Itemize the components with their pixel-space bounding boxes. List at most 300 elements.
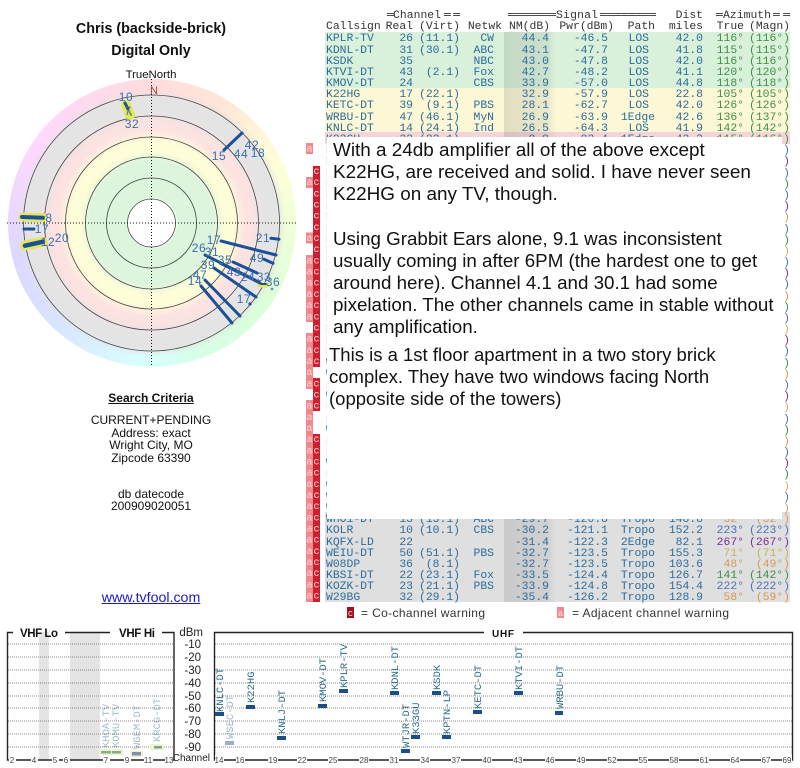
table rows bottom: -31.4 xyxy=(515,537,549,549)
co-channel warning column: c xyxy=(313,580,320,591)
adjacent channel warning column: a xyxy=(306,569,313,580)
table rows top: K22CH xyxy=(326,134,360,146)
dBm scale: -20 xyxy=(184,652,201,664)
table rows bottom: ABC xyxy=(473,514,494,526)
table rows top: 28.1 xyxy=(522,100,549,112)
table rows bottom: 148.8 xyxy=(669,514,703,526)
table rows top: WRBU-DT xyxy=(326,112,374,124)
table rows bottom: KBSI-DT xyxy=(326,570,374,582)
hidden rows: edge slivers: ) xyxy=(783,503,790,515)
table rows bottom: Tropo xyxy=(621,525,655,537)
hidden rows: edge slivers: ) xyxy=(783,279,790,291)
channel ticks: 28 xyxy=(360,756,369,765)
table rows bottom: 48° xyxy=(723,559,744,571)
table rows top: LOS xyxy=(628,78,649,90)
channel ticks: 37 xyxy=(452,756,461,765)
station channel labels: 15 xyxy=(212,149,226,163)
adjacent channel warning column: a xyxy=(306,458,313,468)
channel ticks: 13 xyxy=(165,756,174,765)
table header: Pwr(dBm) xyxy=(559,21,614,33)
legend: warnings xyxy=(347,606,729,620)
hidden rows: edge slivers: K xyxy=(326,179,333,191)
table rows top: (142°) xyxy=(749,123,790,135)
table rows top: 136° xyxy=(717,112,744,124)
adjacent channel warning column: a xyxy=(306,379,313,390)
table rows top: 24 xyxy=(399,78,413,90)
hidden rows: edge slivers: ) xyxy=(783,346,790,358)
dBm scale: -80 xyxy=(184,729,201,741)
table rows top: 105° xyxy=(717,89,744,101)
station channel labels: 12 xyxy=(41,235,55,249)
table rows bottom: CBS xyxy=(473,525,494,537)
hidden rows: edge slivers: K xyxy=(326,402,333,414)
table rows top: 32.9 xyxy=(522,89,549,101)
table rows bottom: Tropo xyxy=(621,581,655,593)
station channel labels: 20 xyxy=(55,231,69,245)
table rows top: 42.0 xyxy=(676,56,703,68)
table header: Dist xyxy=(676,10,703,22)
adjacent channel warning column: a xyxy=(306,268,313,279)
link: tvfool: www.tvfool.com xyxy=(102,590,200,606)
channel ticks: 2 xyxy=(10,756,15,765)
table rows bottom: WEIU-DT xyxy=(326,548,374,560)
hidden rows: edge slivers: K xyxy=(326,257,333,269)
adjacent channel warning column: a xyxy=(306,357,313,368)
table rows top: 126° xyxy=(717,100,744,112)
uhf station labels: KPTN-LP xyxy=(442,690,454,734)
table rows bottom: 154.4 xyxy=(669,581,703,593)
co-channel warning column: c xyxy=(313,357,320,368)
table header: NM(dB) xyxy=(509,21,550,33)
adjacent channel warning column: a xyxy=(306,290,313,301)
co-channel warning column: c xyxy=(313,480,320,491)
table rows top: 47 xyxy=(399,112,413,124)
table rows top: LOS xyxy=(628,33,649,45)
note: grabbit ears: any amplification. xyxy=(333,316,478,337)
note: grabbit ears: pixelation. The other channels came in stable without xyxy=(333,294,774,315)
station channel labels: 49 xyxy=(250,251,264,265)
adjacent channel warning column: a xyxy=(306,502,313,513)
table rows bottom: Tropo xyxy=(621,514,655,526)
uhf station labels: WSEC-DT xyxy=(225,695,237,739)
table rows top: KSDK xyxy=(326,56,354,68)
table rows top: 22 xyxy=(399,134,413,146)
channel ticks: 22 xyxy=(298,756,307,765)
station channel labels: 39 xyxy=(201,258,215,272)
spectrum chart xyxy=(6,627,794,765)
station channel labels xyxy=(35,90,280,306)
table rows top: 115° xyxy=(717,45,744,57)
hidden rows: edge slivers: ) xyxy=(783,481,790,493)
adjacent channel warning column: a xyxy=(306,435,313,446)
table rows top: 142° xyxy=(717,123,744,135)
channel ticks: 6 xyxy=(64,756,69,765)
dBm scale: -70 xyxy=(184,716,201,728)
note: apartment xyxy=(329,344,716,409)
adjacent channel warning column: a xyxy=(306,234,313,245)
table rows top: (116°) xyxy=(749,134,790,146)
co-channel warning column: c xyxy=(313,290,320,301)
table rows top: LOS xyxy=(628,56,649,68)
table rows bottom: 82.1 xyxy=(676,537,703,549)
uhf station labels: WRBU-DT xyxy=(555,665,567,709)
channel ticks: 49 xyxy=(577,756,586,765)
station channel labels: 44 xyxy=(234,147,248,161)
station bearing lines xyxy=(22,103,279,323)
channel ticks: 5 xyxy=(53,756,58,765)
hidden rows: edge slivers: K xyxy=(326,201,333,213)
table header: (Magn) xyxy=(749,21,790,33)
co-channel warning column: c xyxy=(313,491,320,502)
uhf station labels: KETC-DT xyxy=(473,665,485,709)
hidden rows: edge slivers xyxy=(326,145,790,515)
yellow halos for VHF stations xyxy=(23,105,267,285)
table header: (Virt) xyxy=(419,21,460,33)
channel ticks: 25 xyxy=(329,756,338,765)
table rows bottom: (10.1) xyxy=(419,525,460,537)
table rows top: (116°) xyxy=(749,33,790,45)
station channel labels: 17 xyxy=(237,292,251,306)
channel ticks: 43 xyxy=(514,756,523,765)
table rows bottom: (267°) xyxy=(749,537,790,549)
table header: Netwk xyxy=(468,21,502,33)
station channel labels: 42 xyxy=(245,138,259,152)
hidden rows: edge slivers: ) xyxy=(783,391,790,403)
hidden rows: edge slivers: K xyxy=(326,235,333,247)
co-channel warning column: c xyxy=(313,446,320,457)
hidden rows: edge slivers: ) xyxy=(783,268,790,280)
adjacent channel warning column: a xyxy=(306,346,313,357)
adjacent channel warning column: a xyxy=(306,256,313,267)
uhf station labels: KNLJ-DT xyxy=(277,690,289,734)
co-channel warning column: c xyxy=(313,223,320,234)
table header: ══ xyxy=(443,10,460,22)
station channel labels: 10 xyxy=(119,90,133,104)
note: grabbit ears: Using Grabbit Ears alone, 9.1 was inconsistent xyxy=(333,228,722,249)
table rows bottom: -33.5 xyxy=(515,570,549,582)
station channel labels: 36 xyxy=(266,275,280,289)
hidden rows: edge slivers: ) xyxy=(783,156,790,168)
table rows bottom xyxy=(326,514,790,604)
co-channel warning column: c xyxy=(313,390,320,401)
table header: ════════ xyxy=(599,10,656,22)
table rows top: LOS xyxy=(628,89,649,101)
table rows top: 22.8 xyxy=(676,89,703,101)
table rows bottom: -120.8 xyxy=(567,514,608,526)
hidden rows: edge slivers: K xyxy=(326,436,333,448)
hidden rows: edge slivers: K xyxy=(326,224,333,236)
table rows bottom: WHO1-DT xyxy=(326,514,374,526)
hidden rows: edge slivers: ) xyxy=(783,212,790,224)
station channel labels: 17 xyxy=(207,233,221,247)
channel ticks: 16 xyxy=(236,756,245,765)
channel ticks xyxy=(9,755,792,765)
table rows top: Fox xyxy=(473,67,494,79)
table header: Real xyxy=(386,21,413,33)
table header: Path xyxy=(628,21,655,33)
table rows top: 41.9 xyxy=(676,123,703,135)
co-channel warning column: c xyxy=(313,312,320,323)
table rows top: NBC xyxy=(473,56,494,68)
adjacent channel warning column: a xyxy=(306,513,313,524)
table rows top: -64.3 xyxy=(574,123,608,135)
adjacent channel warning column: a xyxy=(306,335,313,346)
table rows bottom: Tropo xyxy=(621,548,655,560)
hidden rows: edge slivers: K xyxy=(326,346,333,358)
co-channel warning column: c xyxy=(313,547,320,558)
co-channel warning column: c xyxy=(313,201,320,212)
dBm scale: -50 xyxy=(184,691,201,703)
table rows top: 31 xyxy=(399,45,413,57)
hidden rows: edge slivers: ) xyxy=(783,324,790,336)
uhf station labels: KDNL-DT xyxy=(390,646,402,690)
adjacent channel warning column: a xyxy=(306,558,313,569)
table rows top: (116°) xyxy=(749,56,790,68)
table rows top: -63.9 xyxy=(574,112,608,124)
co-channel warning column: c xyxy=(313,167,320,178)
vhf frame: VHF Lo xyxy=(20,628,58,640)
station channel labels: 26 xyxy=(192,241,206,255)
note: grabbit ears: around here). Channel 4.1 and 30.1 had some xyxy=(333,272,718,293)
note: grabbit ears: usually coming in after 6PM (the hardest one to get xyxy=(333,250,757,271)
table header: Channel xyxy=(393,10,441,22)
table rows top: 17 xyxy=(399,89,413,101)
table rows top: 14 xyxy=(399,123,413,135)
hidden rows: edge slivers: K xyxy=(326,246,333,258)
station channel labels: 35 xyxy=(218,253,232,267)
vhf station bars: KHOA-TV xyxy=(101,703,113,748)
uhf station labels: KPLR-TV xyxy=(339,643,351,688)
uhf station labels: WTJR-DT xyxy=(401,704,413,748)
vhf frame xyxy=(8,628,174,760)
table rows top: LOS xyxy=(628,123,649,135)
station channel labels: 47 xyxy=(193,268,207,282)
table rows top: (9.1) xyxy=(426,100,460,112)
label: True North: TrueNorth xyxy=(126,69,176,81)
table rows top: (24.1) xyxy=(419,123,460,135)
table rows top: CBS xyxy=(473,78,494,90)
table rows bottom: (223°) xyxy=(749,525,790,537)
note: grabbit ears xyxy=(333,228,774,337)
co-channel warning column: c xyxy=(313,469,320,480)
co-channel warning column: c xyxy=(313,256,320,267)
table rows bottom: -32.7 xyxy=(515,559,549,571)
table rows bottom: -121.1 xyxy=(567,525,608,537)
hidden rows: edge slivers: ) xyxy=(783,224,790,236)
table rows bottom: 2Edge xyxy=(621,537,655,549)
dBm scale: -60 xyxy=(184,703,201,715)
vhf station bars xyxy=(99,698,164,757)
table rows bottom: -30.2 xyxy=(515,525,549,537)
table rows bottom: -35.4 xyxy=(515,592,549,604)
channel ticks: 55 xyxy=(639,756,648,765)
table rows top: 43.1 xyxy=(522,45,549,57)
table rows top: PBS xyxy=(473,100,494,112)
table rows bottom: -33.9 xyxy=(515,581,549,593)
table rows top: LOS xyxy=(628,67,649,79)
table rows top: 26 xyxy=(399,33,413,45)
table rows top: (30.1) xyxy=(419,45,460,57)
search criteria block: CURRENT+PENDING xyxy=(91,413,211,427)
hidden rows: edge slivers: ) xyxy=(783,313,790,325)
station channel labels: 17 xyxy=(35,222,49,236)
table rows top: (137°) xyxy=(749,112,790,124)
adjacent channel warning column xyxy=(306,143,313,602)
hidden rows: edge slivers: K xyxy=(326,168,333,180)
hidden rows: edge slivers: ) xyxy=(783,302,790,314)
table rows top: 43 xyxy=(399,67,413,79)
legend: warnings: c xyxy=(348,609,353,619)
co-channel warning column: c xyxy=(313,178,320,189)
adjacent channel warning column: a xyxy=(306,413,313,424)
table rows top: 44.4 xyxy=(522,33,549,45)
table rows top: (2.1) xyxy=(426,67,460,79)
table rows bottom: KOLR xyxy=(326,525,354,537)
table rows bottom: 152.2 xyxy=(669,525,703,537)
uhf frame: UHF xyxy=(492,629,514,640)
hidden rows: edge slivers: K xyxy=(326,335,333,347)
co-channel warning column: c xyxy=(313,335,320,346)
hidden rows: edge slivers: W xyxy=(326,503,333,515)
channel ticks: 58 xyxy=(670,756,679,765)
table header: miles xyxy=(669,21,703,33)
hidden rows: edge slivers: K xyxy=(326,212,333,224)
hidden rows: edge slivers: ) xyxy=(783,179,790,191)
station channel labels: 21 xyxy=(256,231,270,245)
co-channel warning column: c xyxy=(313,189,320,200)
co-channel warning column: c xyxy=(313,458,320,468)
channel ticks: 69 xyxy=(783,756,792,765)
dBm scale: -40 xyxy=(184,678,201,690)
hidden rows: edge slivers: ) xyxy=(783,380,790,392)
hidden rows: edge slivers: K xyxy=(326,190,333,202)
uhf station labels: KNLC-DT xyxy=(215,668,227,712)
table rows top: (46.1) xyxy=(419,112,460,124)
adjacent channel warning column: a xyxy=(306,547,313,558)
table rows bottom: 23 xyxy=(399,581,413,593)
hidden rows: edge slivers: K xyxy=(326,447,333,459)
hidden rows: edge slivers: K xyxy=(326,414,333,426)
legend: warnings: = Adjacent channel warning xyxy=(572,606,729,620)
hidden rows: edge slivers: W xyxy=(326,481,333,493)
channel ticks: 11 xyxy=(144,756,153,765)
table rows bottom: -29.7 xyxy=(515,514,549,526)
channel ticks: 40 xyxy=(483,756,492,765)
table rows top: 42.6 xyxy=(676,112,703,124)
uhf station labels: K22HG xyxy=(246,671,258,703)
table rows bottom: 155.3 xyxy=(669,548,703,560)
table rows top: (115°) xyxy=(749,45,790,57)
dBm scale: Channel xyxy=(173,753,210,764)
station channel labels: 7 xyxy=(124,104,132,118)
table rows bottom: (142°) xyxy=(749,570,790,582)
adjacent channel warning column: a xyxy=(306,480,313,491)
table rows top: (126°) xyxy=(749,100,790,112)
search criteria block: Address: exact xyxy=(111,426,191,440)
table rows top: 41.8 xyxy=(676,45,703,57)
table rows bottom: 13 xyxy=(399,514,413,526)
station channel labels: 31 xyxy=(205,245,219,259)
vhf frame: VHF Hi xyxy=(119,628,155,640)
table rows top: 41.1 xyxy=(676,67,703,79)
channel ticks: 46 xyxy=(546,756,555,765)
table rows top: 1Edge xyxy=(621,134,655,146)
search criteria block: 200909020051 xyxy=(111,499,191,513)
hidden rows: edge slivers: ) xyxy=(783,469,790,481)
table rows bottom: (13.1) xyxy=(419,514,460,526)
channel ticks: 14 xyxy=(215,756,224,765)
note: apartment: complex. They have two windows facing North xyxy=(329,366,709,387)
hidden rows: edge slivers: W xyxy=(326,369,333,381)
hidden rows: edge slivers: W xyxy=(326,492,333,504)
table rows top: (118°) xyxy=(749,78,790,90)
table rows bottom: -124.4 xyxy=(567,570,608,582)
hidden rows: edge slivers: ) xyxy=(783,447,790,459)
table rows bottom: 128.9 xyxy=(669,592,703,604)
station channel labels: 18 xyxy=(251,146,265,160)
table header: ══ xyxy=(772,10,790,22)
hidden rows: edge slivers: ) xyxy=(783,369,790,381)
adjacent channel warning column: a xyxy=(306,301,313,312)
table rows bottom: (51.1) xyxy=(419,548,460,560)
vhf station bars: WGEM-DT xyxy=(132,705,144,749)
co-channel warning column: c xyxy=(313,268,320,279)
dBm scale: -90 xyxy=(184,742,201,754)
co-channel warning column: c xyxy=(313,379,320,390)
table rows bottom: PBS xyxy=(473,581,494,593)
table rows bottom: -122.3 xyxy=(567,537,608,549)
co-channel warning column: c xyxy=(313,435,320,446)
uhf station labels: KTVI-DT xyxy=(514,646,526,690)
note: amplifier xyxy=(333,140,751,205)
hidden rows: edge slivers: ) xyxy=(783,458,790,470)
adjacent channel warning column: a xyxy=(306,524,313,536)
table rows top: -57.0 xyxy=(574,78,608,90)
dBm scale: -10 xyxy=(184,639,201,651)
co-channel warning column: c xyxy=(313,301,320,312)
table rows top: (11.1) xyxy=(419,33,460,45)
hidden rows: edge slivers: ) xyxy=(783,402,790,414)
table rows top: KTVI-DT xyxy=(326,67,374,79)
co-channel warning column: c xyxy=(313,245,320,256)
table rows bottom: -123.5 xyxy=(567,559,608,571)
table rows top: 8.8 xyxy=(528,134,549,146)
table rows top xyxy=(326,33,790,146)
adjacent channel warning column: a xyxy=(306,446,313,457)
vhf station bars: KRCG-DT xyxy=(152,698,164,742)
adjacent channel warning column: a xyxy=(306,580,313,591)
table rows top: 39 xyxy=(399,100,413,112)
co-channel warning column: c xyxy=(313,234,320,245)
table rows bottom: Tropo xyxy=(621,559,655,571)
table rows top: -48.2 xyxy=(574,67,608,79)
table rows top: 116° xyxy=(717,56,744,68)
table rows top: KPLR-TV xyxy=(326,33,374,45)
legend: warnings: a xyxy=(558,609,564,619)
table header: ═ xyxy=(386,10,394,22)
adjacent channel warning column: a xyxy=(306,402,313,413)
co-channel warning column: c xyxy=(313,402,320,413)
hidden rows: edge slivers: K xyxy=(326,156,333,168)
channel ticks: 61 xyxy=(700,756,709,765)
table rows bottom: (21.1) xyxy=(419,581,460,593)
table rows top: 35 xyxy=(399,56,413,68)
co-channel warning column: c xyxy=(313,279,320,290)
table header: ═ xyxy=(715,10,723,22)
co-channel warning column xyxy=(313,166,320,602)
table rows top: -83.4 xyxy=(574,134,608,146)
table rows bottom: (29.1) xyxy=(419,592,460,604)
